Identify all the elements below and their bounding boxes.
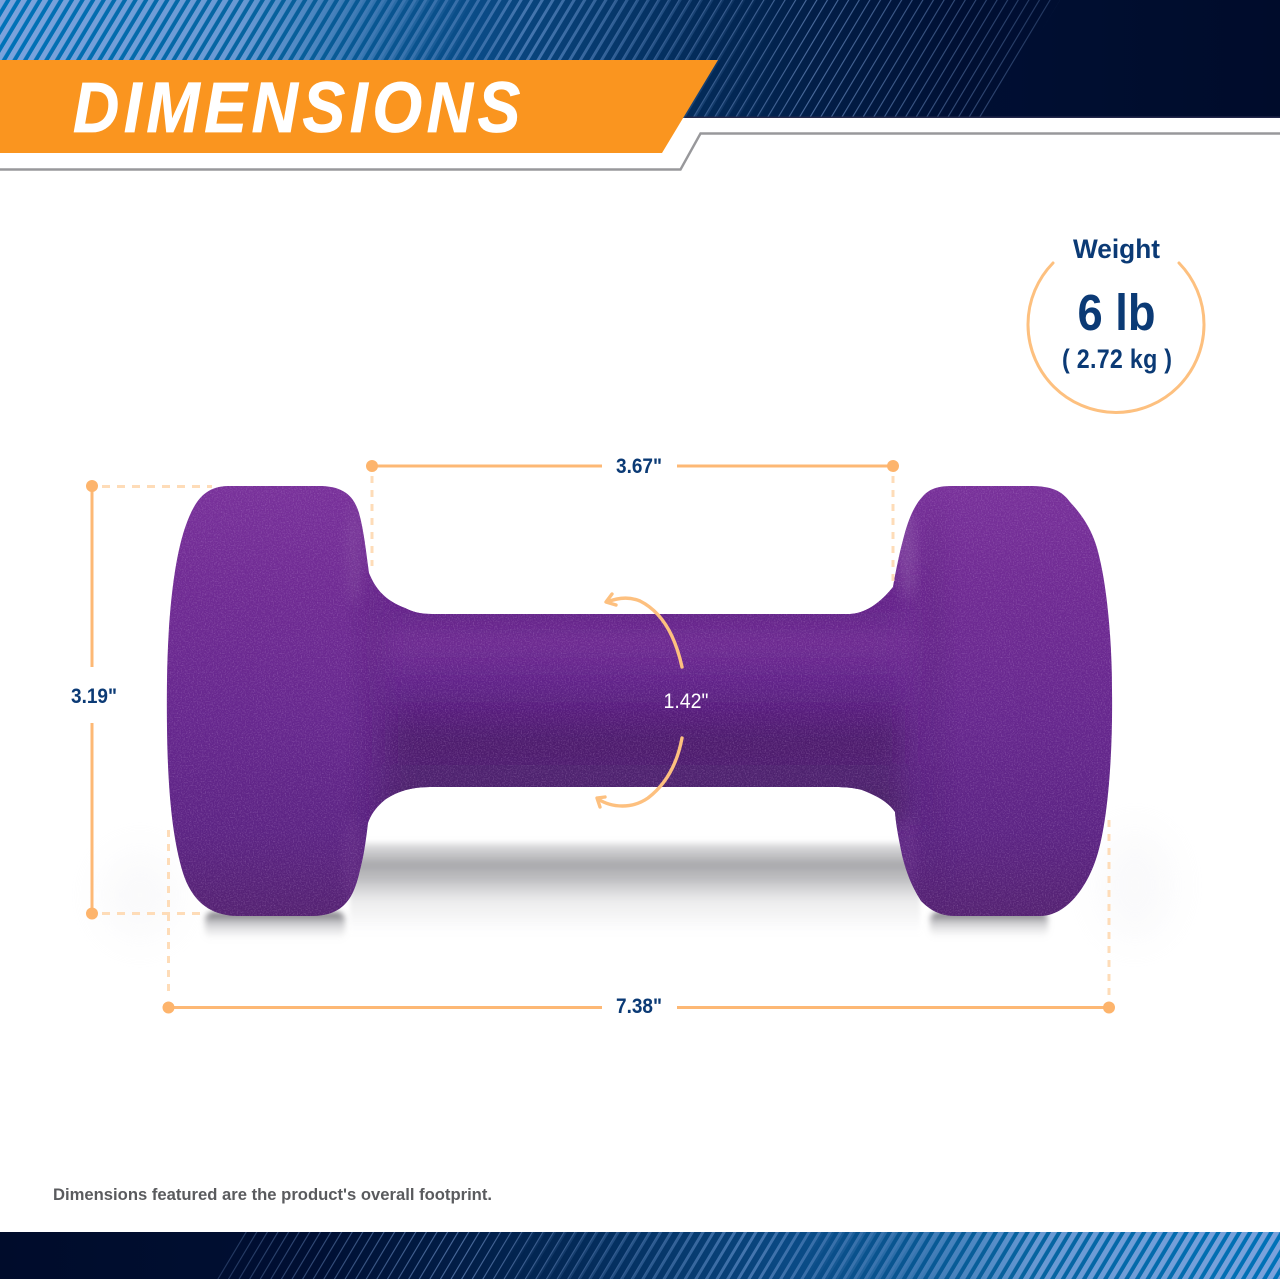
dimension: head height 3.19 in <box>71 480 212 920</box>
arrow: upper curved <box>606 594 682 667</box>
dimension: handle diameter 1.42 in with curved arrows <box>597 594 708 807</box>
purple neoprene dumbbell <box>160 480 1120 920</box>
footnote: Dimensions featured are the product's overall footprint. <box>53 1185 492 1204</box>
dimension: handle diameter 1.42 in with curved arrows: 1.42" <box>664 690 708 713</box>
footer banner: blue striped gradient <box>0 1232 1280 1279</box>
header banner: blue striped gradient <box>0 0 1280 118</box>
weight badge <box>1028 234 1204 412</box>
white notch under the title <box>0 118 1280 169</box>
title ribbon <box>0 60 718 153</box>
dimension: overall length 7.38 in <box>162 820 1115 1018</box>
dimension: head height 3.19 in: 3.19" <box>71 685 117 708</box>
weight badge: ( 2.72 kg ) <box>1062 344 1172 374</box>
dumbbell handle <box>385 575 905 825</box>
header outline rule <box>0 134 1280 170</box>
dumbbell shadows <box>100 830 1173 940</box>
arrow: lower curved <box>597 738 682 807</box>
title: DIMENSIONS <box>73 69 520 148</box>
weight badge: Weight <box>1073 234 1160 264</box>
dimension: handle length 3.67 in: 3.67" <box>616 455 662 478</box>
dimension: handle length 3.67 in <box>366 455 899 582</box>
dimension: overall length 7.38 in: 7.38" <box>616 995 662 1018</box>
weight badge: 6 lb <box>1078 284 1156 341</box>
